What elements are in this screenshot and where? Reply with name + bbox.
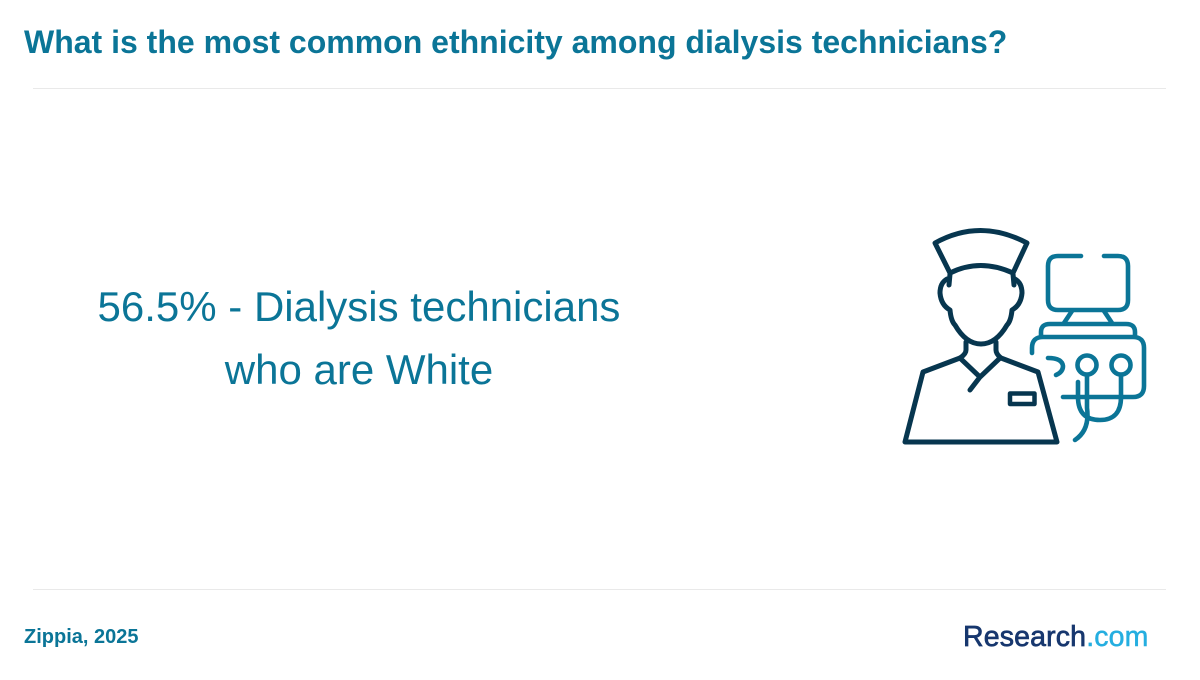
main statistic text: 56.5% - Dialysis technicians (98, 283, 620, 330)
logo: Research.com: Research.com (963, 621, 1149, 653)
source: Zippia, 2025 (24, 626, 138, 648)
icon: technician figure (905, 230, 1057, 442)
main statistic text: who are White (225, 346, 493, 393)
main statistic text (98, 283, 620, 393)
icon: dialysis technician with machine (902, 228, 1146, 444)
title: What is the most common ethnicity among dialysis technicians? (24, 24, 1007, 60)
icon: dialysis machine (1032, 256, 1144, 440)
